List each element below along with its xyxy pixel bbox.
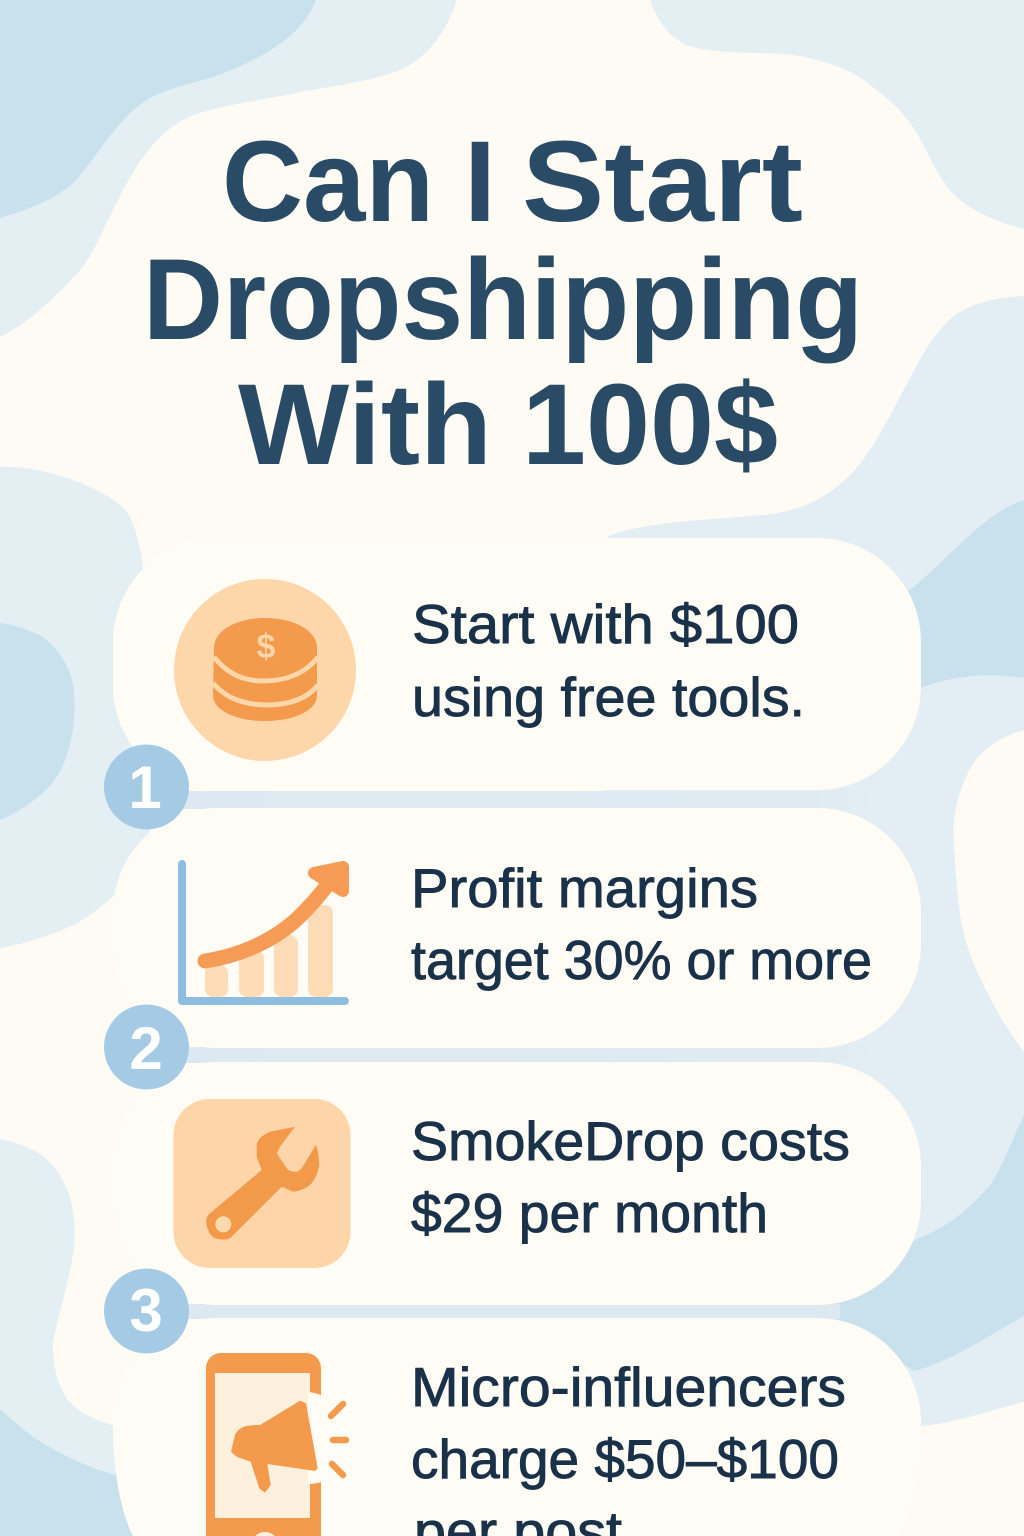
title: 100$ [522,361,778,489]
step 2 text: target 30% or more [411,929,872,991]
icon: growth chart [182,864,345,1001]
step 3 text [411,1110,850,1244]
badge: number 3: 3 [129,1277,163,1344]
badge: number 2 [104,1004,189,1090]
step 1 text: Start with $100 [412,593,799,655]
step 2 text: Profit margins [411,857,758,919]
panel: step 4 [113,1318,921,1536]
panel: step 3 [113,1062,921,1305]
icon: coin stack: $ [257,628,276,666]
icon: wrench [174,1099,350,1268]
step 3 text: $29 per month [411,1182,768,1244]
step 1 text: using free tools. [412,666,805,728]
badge: number 3 [104,1268,189,1354]
title: I [464,118,496,246]
connector strip 3 [170,1304,840,1319]
icon: coin stack [174,579,356,761]
connector strip 1 [170,791,880,809]
title: Dropshipping [143,236,863,364]
title: Can [222,118,434,246]
badge: number 2: 2 [129,1015,163,1082]
badge: number 1: 1 [128,754,162,821]
badge: number 1 [104,744,189,830]
step 4 text: charge $50–$100 [411,1428,839,1490]
icon: phone with megaphone [206,1353,346,1536]
step 1 text [412,593,805,728]
step 4 text: Micro-influencers [411,1356,846,1418]
step 4 text [411,1356,846,1536]
panel: step 1 [113,538,921,790]
step 2 text [411,857,872,991]
panel: step 2 [113,808,921,1048]
title [143,118,863,489]
title: With [238,361,492,489]
title: Start [522,118,803,246]
connector strip 2 [170,1047,880,1063]
step 3 text: SmokeDrop costs [411,1110,850,1172]
